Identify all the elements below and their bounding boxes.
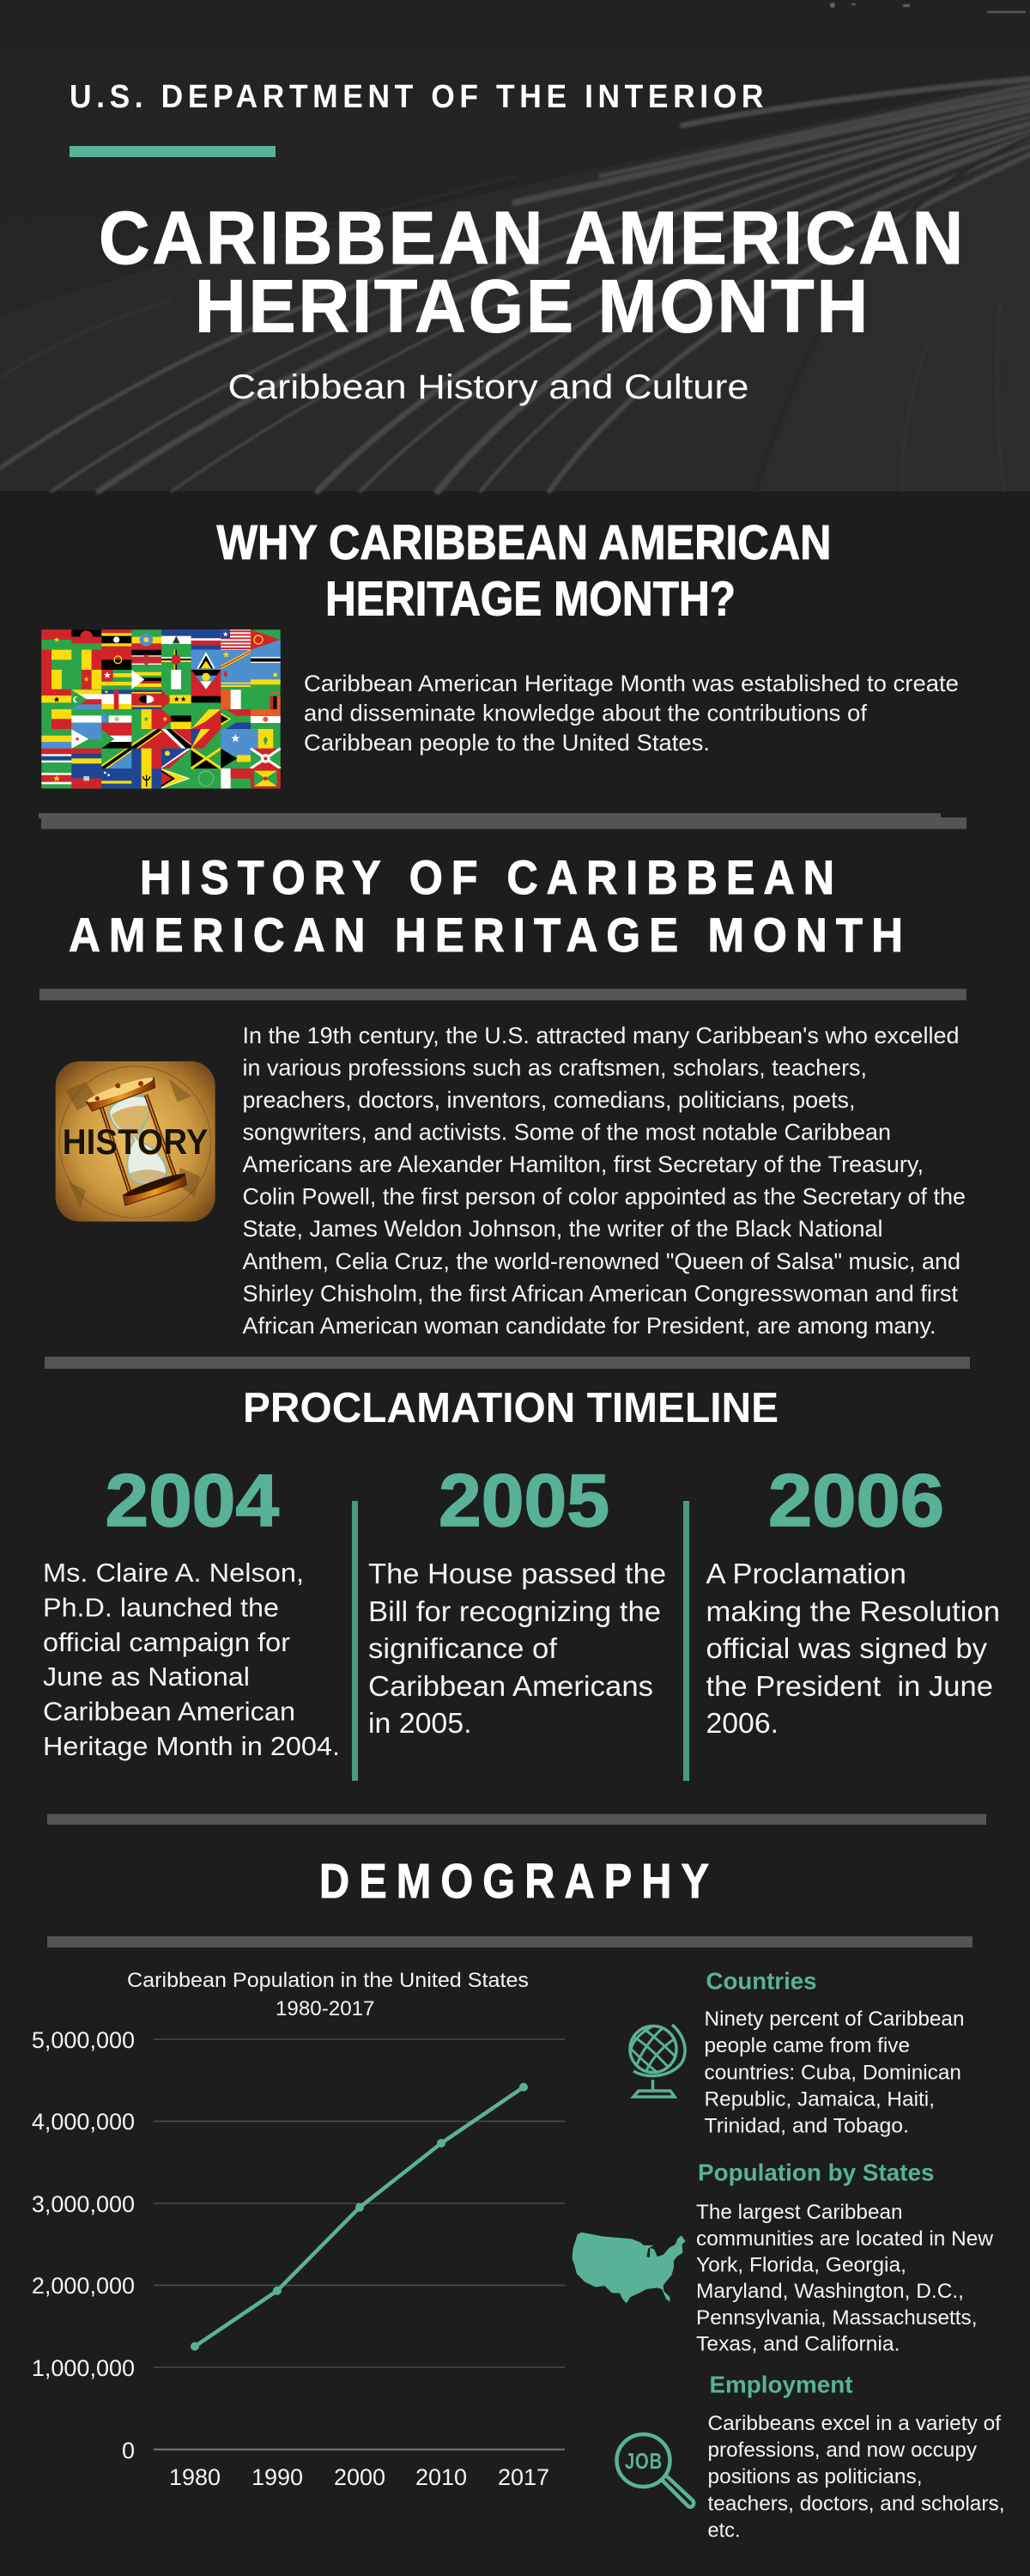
text: countries: Trinidad, and Tobago. [704, 2114, 909, 2138]
timeline column 2004 [43, 1460, 340, 1761]
section: demography [32, 1854, 1004, 2542]
hero panel [0, 0, 1030, 491]
main title: CARIBBEAN AMERICAN [99, 197, 966, 280]
section: history [39, 850, 966, 1339]
block: employment [616, 2372, 1004, 2542]
history paragraph: in various professions such as craftsmen, scholars, teachers, [242, 1054, 867, 1080]
y axis labels [32, 2027, 135, 2464]
text: population by states: Maryland, Washington, D.C., [696, 2280, 964, 2303]
timeline column 2004: Caribbean American [43, 1697, 295, 1726]
heading: PROCLAMATION TIMELINE [243, 1385, 779, 1431]
text: countries: countries: Cuba, Dominican [704, 2061, 961, 2085]
y axis labels: 5,000,000 [32, 2027, 135, 2053]
text: countries: people came from five [704, 2034, 910, 2057]
main title [99, 197, 966, 349]
intro paragraph: and disseminate knowledge about the contributions of [304, 701, 867, 726]
heading [216, 515, 831, 627]
timeline column 2004: 2004 [105, 1460, 279, 1542]
y axis labels: 1,000,000 [32, 2355, 135, 2381]
heading: HISTORY OF CARIBBEAN [140, 850, 843, 904]
icon: job magnifier [616, 2434, 694, 2507]
text: population by states: Texas, and California. [696, 2332, 900, 2356]
chart title: 1980-2017 [276, 1997, 374, 2020]
timeline column 2004: Heritage Month in 2004. [43, 1731, 340, 1761]
heading: HERITAGE MONTH? [325, 572, 736, 627]
timeline column 2005 [368, 1460, 666, 1739]
timeline column 2005: 2005 [439, 1460, 609, 1542]
chart title [127, 1969, 529, 2020]
hero photo background: highway light trails [0, 0, 1030, 491]
text: employment [707, 2412, 1004, 2542]
subtitle: Caribbean History and Culture [228, 368, 748, 406]
y axis labels: 3,000,000 [32, 2191, 135, 2217]
history paragraph: African American woman candidate for President, are among many. [242, 1313, 936, 1339]
x axis labels: 2010 [415, 2464, 467, 2490]
accent bar [70, 146, 276, 157]
icon: job magnifier: JOB [625, 2448, 663, 2474]
text: population by states: communities are located in New [696, 2227, 994, 2251]
text: employment: teachers, doctors, and scholars, [707, 2492, 1004, 2516]
heading: AMERICAN HERITAGE MONTH [69, 908, 912, 962]
history paragraph: State, James Weldon Johnson, the writer of the Black National [242, 1216, 882, 1242]
history paragraph: In the 19th century, the U.S. attracted many Caribbean's who excelled [242, 1023, 960, 1048]
y axis labels: 0 [122, 2438, 135, 2464]
image: flag mosaic [41, 629, 281, 788]
text: employment: positions as politicians, [707, 2465, 922, 2488]
icon: globe [630, 2025, 685, 2097]
x axis labels: 2017 [498, 2464, 549, 2490]
text: employment: Caribbeans excel in a variety of [707, 2412, 1001, 2435]
block: population by states [572, 2159, 994, 2356]
y axis labels: 4,000,000 [32, 2109, 135, 2135]
timeline column 2006: 2006 [768, 1460, 944, 1542]
history paragraph: preachers, doctors, inventors, comedians, politicians, poets, [242, 1087, 855, 1113]
text: employment: professions, and now occupy [707, 2439, 977, 2462]
text: employment: etc. [707, 2519, 740, 2542]
timeline column 2005: in 2005. [368, 1707, 472, 1739]
main title: HERITAGE MONTH [195, 264, 870, 349]
history paragraph: songwriters, and activists. Some of the most notable Caribbean [242, 1120, 891, 1145]
section: proclamation timeline [43, 1385, 1000, 1781]
timeline column 2006: the President in June [706, 1670, 993, 1702]
text: population by states: York, Florida, Georgia, [696, 2253, 906, 2277]
heading [69, 850, 912, 962]
timeline column 2004: June as National [43, 1662, 250, 1692]
timeline column 2005: Bill for recognizing the [368, 1595, 661, 1627]
text: population by states [696, 2201, 994, 2356]
heading: WHY CARIBBEAN AMERICAN [216, 515, 831, 570]
icon: history hourglass badge [56, 1061, 215, 1222]
icon: history hourglass badge: HISTORY [63, 1121, 209, 1162]
timeline column 2006: A Proclamation [706, 1558, 906, 1589]
timeline column 2005: Caribbean Americans [368, 1670, 653, 1702]
section: why Caribbean American Heritage Month [41, 515, 959, 788]
timeline column 2006: making the Resolution [706, 1595, 1000, 1627]
x axis labels [169, 2464, 549, 2490]
timeline column 2004: Ph.D. launched the [43, 1592, 279, 1623]
history paragraph: Shirley Chisholm, the first African American Congresswoman and first [242, 1281, 959, 1307]
history paragraph: Colin Powell, the first person of color appointed as the Secretary of the [242, 1183, 966, 1209]
x axis labels: 1980 [169, 2464, 221, 2490]
x axis labels: 1990 [251, 2464, 303, 2490]
heading: DEMOGRAPHY [319, 1854, 718, 1909]
timeline column 2006: official was signed by [706, 1632, 988, 1664]
history paragraph: Americans are Alexander Hamilton, first Secretary of the Treasury, [242, 1151, 924, 1177]
history paragraph [242, 1023, 966, 1339]
icon: USA map [572, 2233, 686, 2303]
block: employment: Employment [709, 2372, 853, 2397]
timeline column 2005: The House passed the [368, 1558, 666, 1589]
intro paragraph [304, 671, 959, 756]
data line [191, 2083, 528, 2351]
timeline column 2006 [706, 1460, 1000, 1739]
organization name: U.S. DEPARTMENT OF THE INTERIOR [70, 79, 768, 115]
history paragraph: Anthem, Celia Cruz, the world-renowned "Queen of Salsa" music, and [242, 1249, 960, 1274]
timeline column 2004: Ms. Claire A. Nelson, [43, 1558, 304, 1588]
block: countries [630, 1968, 965, 2138]
x axis labels: 2000 [334, 2464, 385, 2490]
timeline column 2006: 2006. [706, 1707, 779, 1739]
block: population by states: Population by States [698, 2159, 934, 2186]
timeline column 2004: official campaign for [43, 1627, 290, 1657]
text: population by states: The largest Caribbean [696, 2201, 903, 2224]
line chart: Caribbean population [32, 1969, 565, 2490]
y axis labels: 2,000,000 [32, 2273, 135, 2299]
text: population by states: Pennsylvania, Massachusetts, [696, 2306, 977, 2330]
block: countries: Countries [706, 1968, 817, 1994]
chart title: Caribbean Population in the United States [127, 1969, 529, 1992]
text: countries [704, 2008, 965, 2138]
text: countries: Ninety percent of Caribbean [704, 2008, 965, 2031]
timeline column 2005: significance of [368, 1632, 558, 1664]
text: countries: Republic, Jamaica, Haiti, [704, 2088, 935, 2111]
intro paragraph: Caribbean American Heritage Month was established to create [304, 671, 959, 696]
intro paragraph: Caribbean people to the United States. [304, 730, 710, 756]
